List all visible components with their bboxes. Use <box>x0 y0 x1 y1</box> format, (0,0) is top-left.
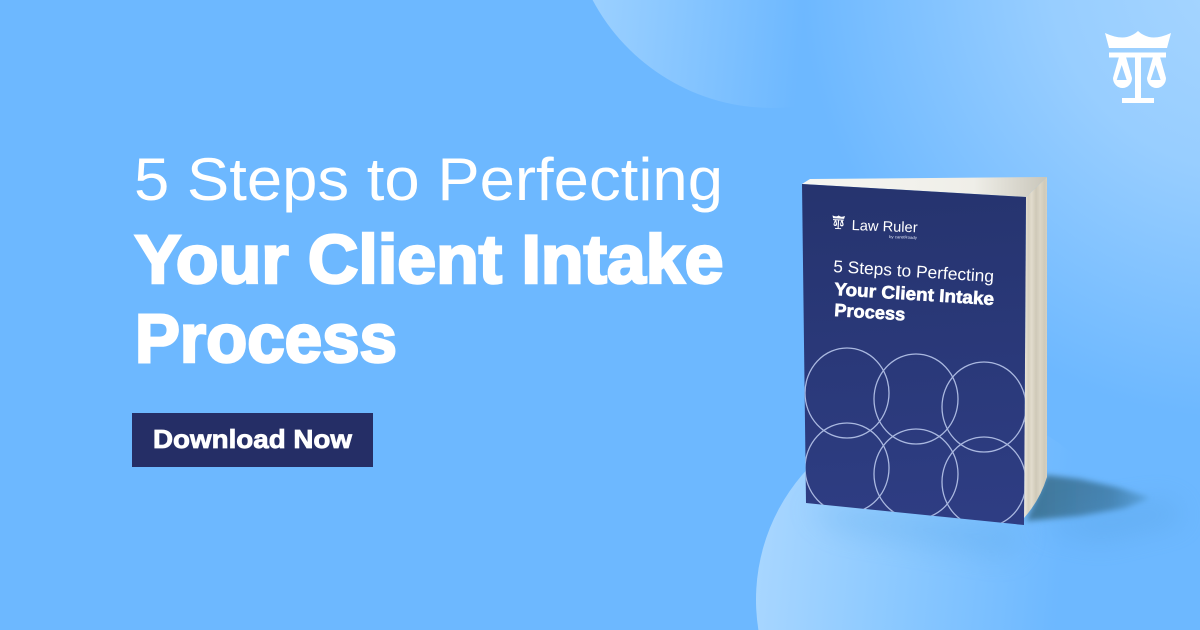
book shadow <box>806 475 1185 556</box>
heading line 2: Your Client Intake <box>134 221 724 298</box>
book top edge <box>802 177 1047 197</box>
cover logo icon <box>832 215 845 229</box>
cover brand name: Law Ruler <box>851 218 918 236</box>
background blob: bottom circle <box>756 408 1140 630</box>
heading line 3: Process <box>135 300 397 377</box>
icon: law ruler logo <box>1105 31 1171 103</box>
heading line 1: 5 Steps to Perfecting <box>134 146 723 213</box>
cover title line 2: Your Client Intake <box>834 279 995 309</box>
button: download now <box>132 413 373 467</box>
cover title <box>833 257 995 324</box>
cover brand byline: by caretRoady <box>889 234 917 240</box>
cover circles <box>805 348 1026 527</box>
heading <box>134 146 724 377</box>
cover title line 1: 5 Steps to Perfecting <box>833 257 995 286</box>
book cover <box>802 184 1026 525</box>
button: download now: Download Now <box>153 424 353 454</box>
cover title line 3: Process <box>834 300 906 324</box>
book pages <box>1024 177 1047 518</box>
book <box>802 177 1047 527</box>
background blob: top circle <box>593 0 951 108</box>
background wash: top right <box>760 0 1200 470</box>
